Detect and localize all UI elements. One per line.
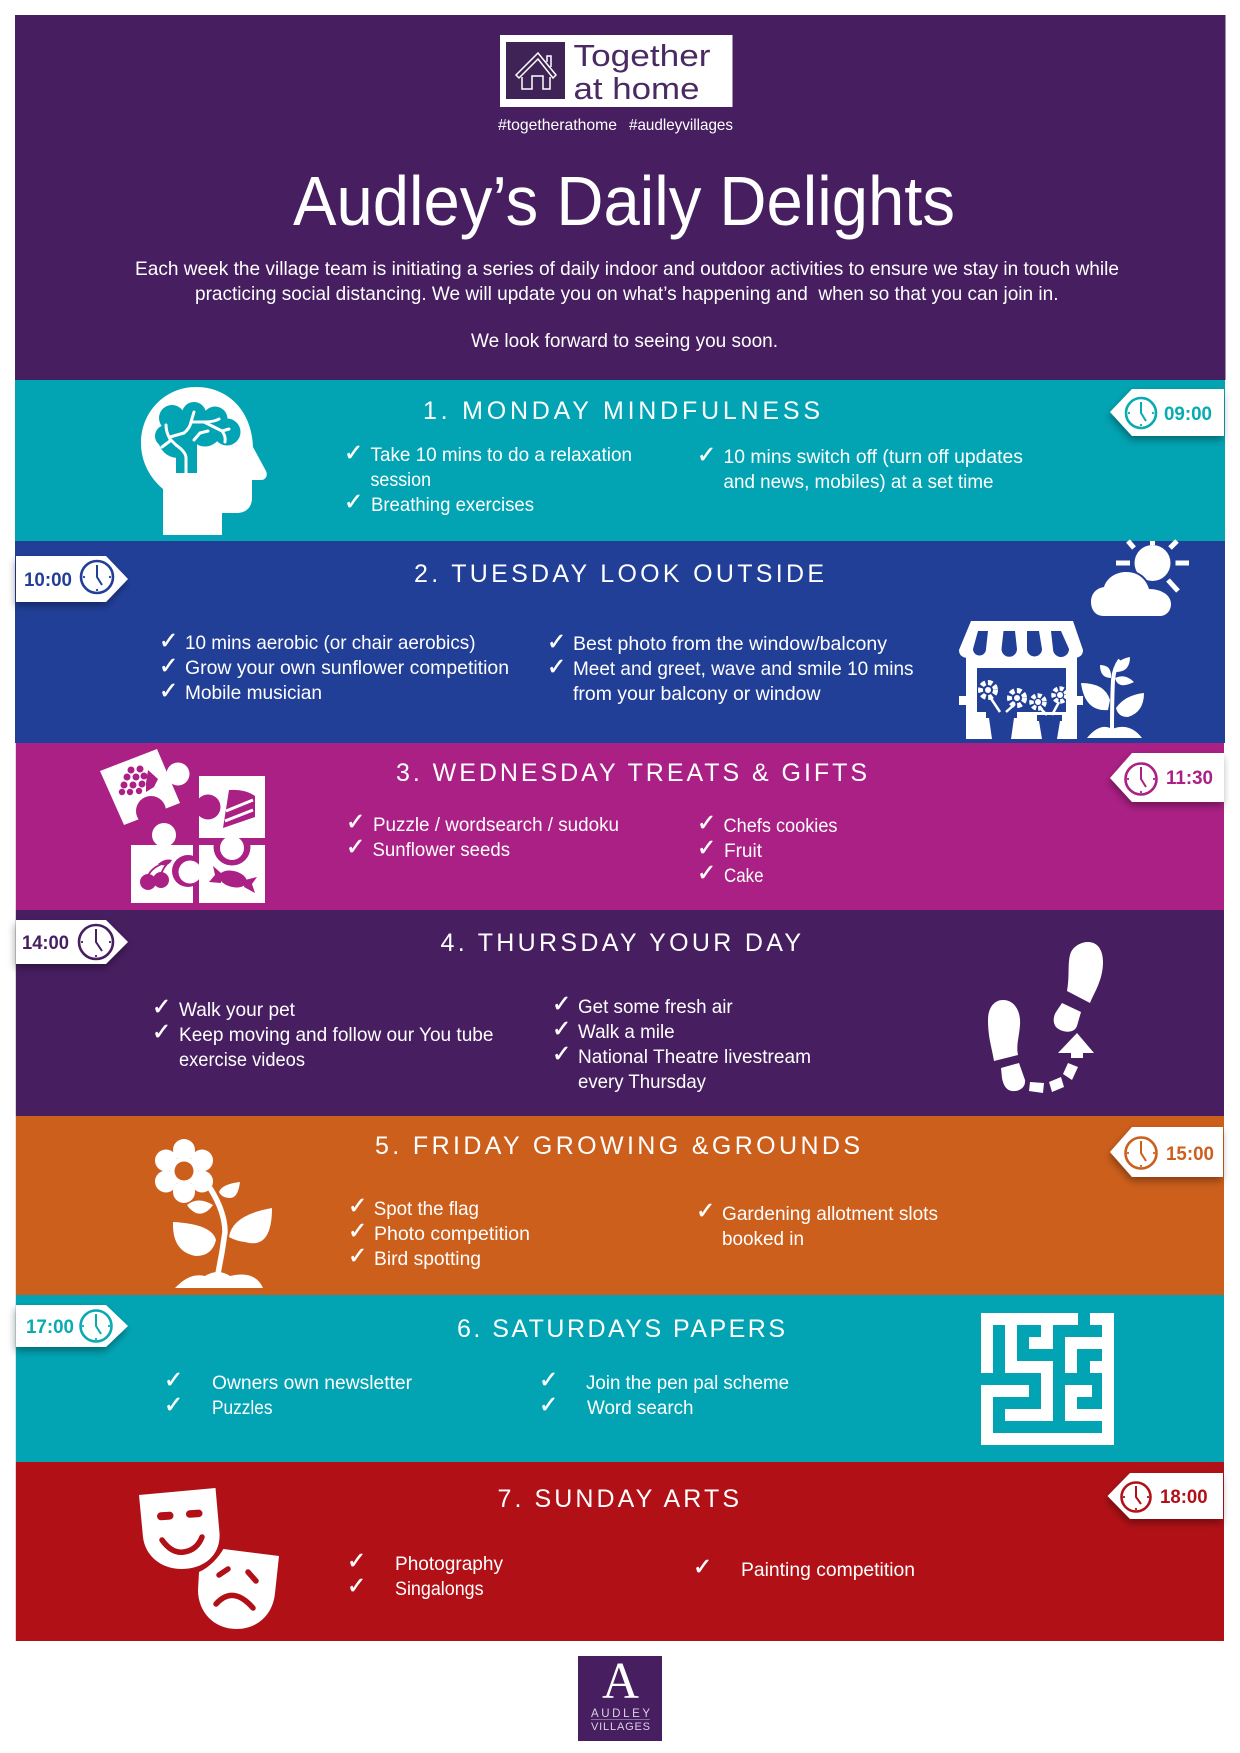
list: left: Keep moving and follow our You tube [179, 1024, 494, 1046]
list: right: ✓ [693, 1554, 712, 1580]
list: right [547, 630, 914, 705]
list: left: exercise videos [179, 1049, 305, 1071]
time tag: 09:00: 09:00 [1164, 404, 1212, 425]
hashtags: #audleyvillages [629, 117, 733, 134]
list: left: 10 mins aerobic (or chair aerobics) [185, 632, 476, 654]
list: left [164, 1368, 412, 1419]
icon: maze [981, 1313, 1114, 1445]
list: right: ✓ [552, 1042, 571, 1068]
heading: 6. SATURDAYS PAPERS [457, 1315, 785, 1343]
list: left: Puzzles [212, 1397, 273, 1419]
list: right [697, 810, 838, 887]
list: left: Bird spotting [374, 1248, 481, 1270]
list: left: ✓ [346, 834, 365, 860]
intro text [135, 258, 1119, 352]
list: right: Best photo from the window/balcony [573, 633, 887, 655]
icon: clock [80, 1310, 112, 1342]
list: right: Fruit [724, 840, 763, 862]
list: left [152, 994, 494, 1071]
list: right: ✓ [552, 992, 571, 1018]
time tag: 15:00 [1110, 1127, 1223, 1177]
list: right: ✓ [697, 810, 716, 836]
logo: Audley Villages: A [602, 1653, 639, 1710]
list: right: National Theatre livestream [578, 1046, 811, 1068]
list: right: ✓ [547, 654, 566, 680]
list: right: ✓ [552, 1016, 571, 1042]
list: right: ✓ [547, 630, 566, 656]
list: left: Take 10 mins to do a relaxation [370, 444, 632, 466]
time tag: 11:30: 11:30 [1166, 768, 1213, 789]
list: left: ✓ [164, 1368, 183, 1394]
icon: clock [1126, 1138, 1156, 1168]
list: left: ✓ [164, 1392, 183, 1418]
hashtags: #togetherathome [498, 117, 617, 134]
panel: header [15, 15, 1226, 380]
list: left: ✓ [152, 994, 171, 1020]
icon: footprints with arrow [988, 942, 1103, 1093]
list: right [552, 992, 811, 1093]
list: right: from your balcony or window [573, 683, 821, 705]
list: left: ✓ [159, 628, 178, 654]
list: left: Breathing exercises [371, 494, 534, 516]
list: right: Cake [724, 865, 764, 887]
list: left: Photo competition [374, 1223, 530, 1245]
intro text: Each week the village team is initiating a series of daily indoor and outdoor activities to ensure we stay in touch while [135, 258, 1119, 280]
list: right [539, 1368, 789, 1419]
list: left: Sunflower seeds [372, 839, 510, 861]
icon: theatre masks [139, 1488, 279, 1629]
list: right: Gardening allotment slots [722, 1203, 938, 1225]
intro text: We look forward to seeing you soon. [471, 330, 778, 352]
panel: sunday arts [16, 1462, 1224, 1641]
list: right: Get some fresh air [578, 996, 733, 1018]
time tag: 18:00 [1108, 1473, 1223, 1519]
list: right [696, 1198, 938, 1250]
list: right: ✓ [539, 1392, 558, 1418]
icon: clock [1126, 398, 1156, 428]
heading: 3. WEDNESDAY TREATS & GIFTS [396, 759, 867, 787]
panel: monday mindfulness [15, 380, 1225, 541]
list: right: ✓ [697, 442, 716, 468]
list: left [344, 440, 632, 516]
list: right: ✓ [697, 836, 716, 862]
time tag: 15:00: 15:00 [1166, 1144, 1214, 1165]
list: left: Owners own newsletter [212, 1372, 412, 1394]
list: right [693, 1554, 915, 1581]
panel: thursday your day [16, 910, 1224, 1116]
list: left: ✓ [159, 654, 178, 680]
time tag: 10:00: 10:00 [24, 570, 72, 591]
time tag: 14:00: 14:00 [22, 933, 69, 954]
list: right: Meet and greet, wave and smile 10 mins [573, 658, 914, 680]
list: left: ✓ [159, 678, 178, 704]
logo: Together at home [500, 35, 732, 107]
list: right: Word search [587, 1397, 694, 1419]
logo: Audley Villages [578, 1653, 662, 1741]
list: left [348, 1194, 530, 1270]
time tag: 10:00 [16, 556, 128, 602]
list: left: Grow your own sunflower competition [185, 657, 509, 679]
list: left: ✓ [348, 1244, 367, 1270]
list: right: ✓ [696, 1198, 715, 1224]
time tag: 09:00 [1110, 389, 1224, 436]
intro text: practicing social distancing. We will update you on what’s happening and when so that you can join in. [195, 283, 1058, 305]
logo: Together at home: Together [574, 38, 710, 73]
list: left: session [370, 469, 431, 491]
list: right: Chefs cookies [724, 815, 838, 837]
time tag: 18:00: 18:00 [1160, 1487, 1208, 1508]
list: left: Singalongs [395, 1578, 484, 1600]
panel: wednesday treats and gifts [16, 743, 1224, 910]
list: left: ✓ [347, 1574, 366, 1600]
list: right [697, 442, 1023, 493]
time tag: 14:00 [16, 920, 128, 964]
heading: 5. FRIDAY GROWING &GROUNDS [375, 1132, 860, 1160]
list: left [347, 1548, 503, 1600]
logo: Audley Villages: AUDLEY [591, 1708, 650, 1720]
icon: clock [1126, 764, 1156, 794]
logo: Audley Villages: VILLAGES [591, 1721, 650, 1733]
list: left: ✓ [344, 490, 363, 516]
list: right: every Thursday [578, 1071, 706, 1093]
list: left: Mobile musician [185, 682, 322, 704]
list: right: ✓ [539, 1368, 558, 1394]
heading: 7. SUNDAY ARTS [498, 1485, 739, 1513]
time tag: 17:00: 17:00 [26, 1317, 74, 1338]
heading: 4. THURSDAY YOUR DAY [440, 929, 801, 957]
icon: flower plant [155, 1139, 272, 1288]
list: left [346, 810, 619, 861]
list: left: ✓ [348, 1218, 367, 1244]
list: left: Spot the flag [374, 1198, 479, 1220]
icon: clock [1122, 1482, 1150, 1512]
time tag: 11:30 [1110, 753, 1224, 802]
list: right: 10 mins switch off (turn off updates [724, 446, 1023, 468]
list: left: ✓ [346, 810, 365, 836]
list: left: ✓ [152, 1020, 171, 1046]
icon: puzzle pieces [100, 749, 265, 903]
icon: house [516, 53, 556, 89]
list: left: Puzzle / wordsearch / sudoku [373, 814, 619, 836]
logo: Together at home: at home [574, 71, 700, 106]
list: left [159, 628, 509, 704]
list: right: booked in [722, 1228, 804, 1250]
panel: friday growing and grounds [16, 1116, 1224, 1295]
title: Audley’s Daily Delights [293, 162, 955, 240]
icon: shop with flower pots [959, 621, 1083, 739]
icon: clock [81, 561, 113, 593]
list: left: Photography [395, 1553, 503, 1575]
hashtags [498, 117, 733, 134]
icon: clock [79, 925, 113, 959]
icon: sun and cloud [1091, 541, 1189, 616]
list: left: ✓ [344, 440, 363, 466]
icon: plant [1081, 657, 1144, 738]
heading: 1. MONDAY MINDFULNESS [423, 397, 820, 425]
list: right: Walk a mile [578, 1021, 675, 1043]
icon: head with brain [141, 387, 267, 535]
time tag: 17:00 [16, 1305, 128, 1347]
panel: saturdays papers [16, 1295, 1224, 1462]
list: left: Walk your pet [179, 999, 296, 1021]
list: left: ✓ [348, 1194, 367, 1220]
panel: tuesday look outside [15, 541, 1225, 743]
list: right: Join the pen pal scheme [586, 1372, 789, 1394]
list: right: Painting competition [741, 1559, 915, 1581]
heading: 2. TUESDAY LOOK OUTSIDE [414, 560, 824, 588]
list: left: ✓ [347, 1548, 366, 1574]
list: right: ✓ [697, 860, 716, 886]
list: right: and news, mobiles) at a set time [724, 471, 994, 493]
